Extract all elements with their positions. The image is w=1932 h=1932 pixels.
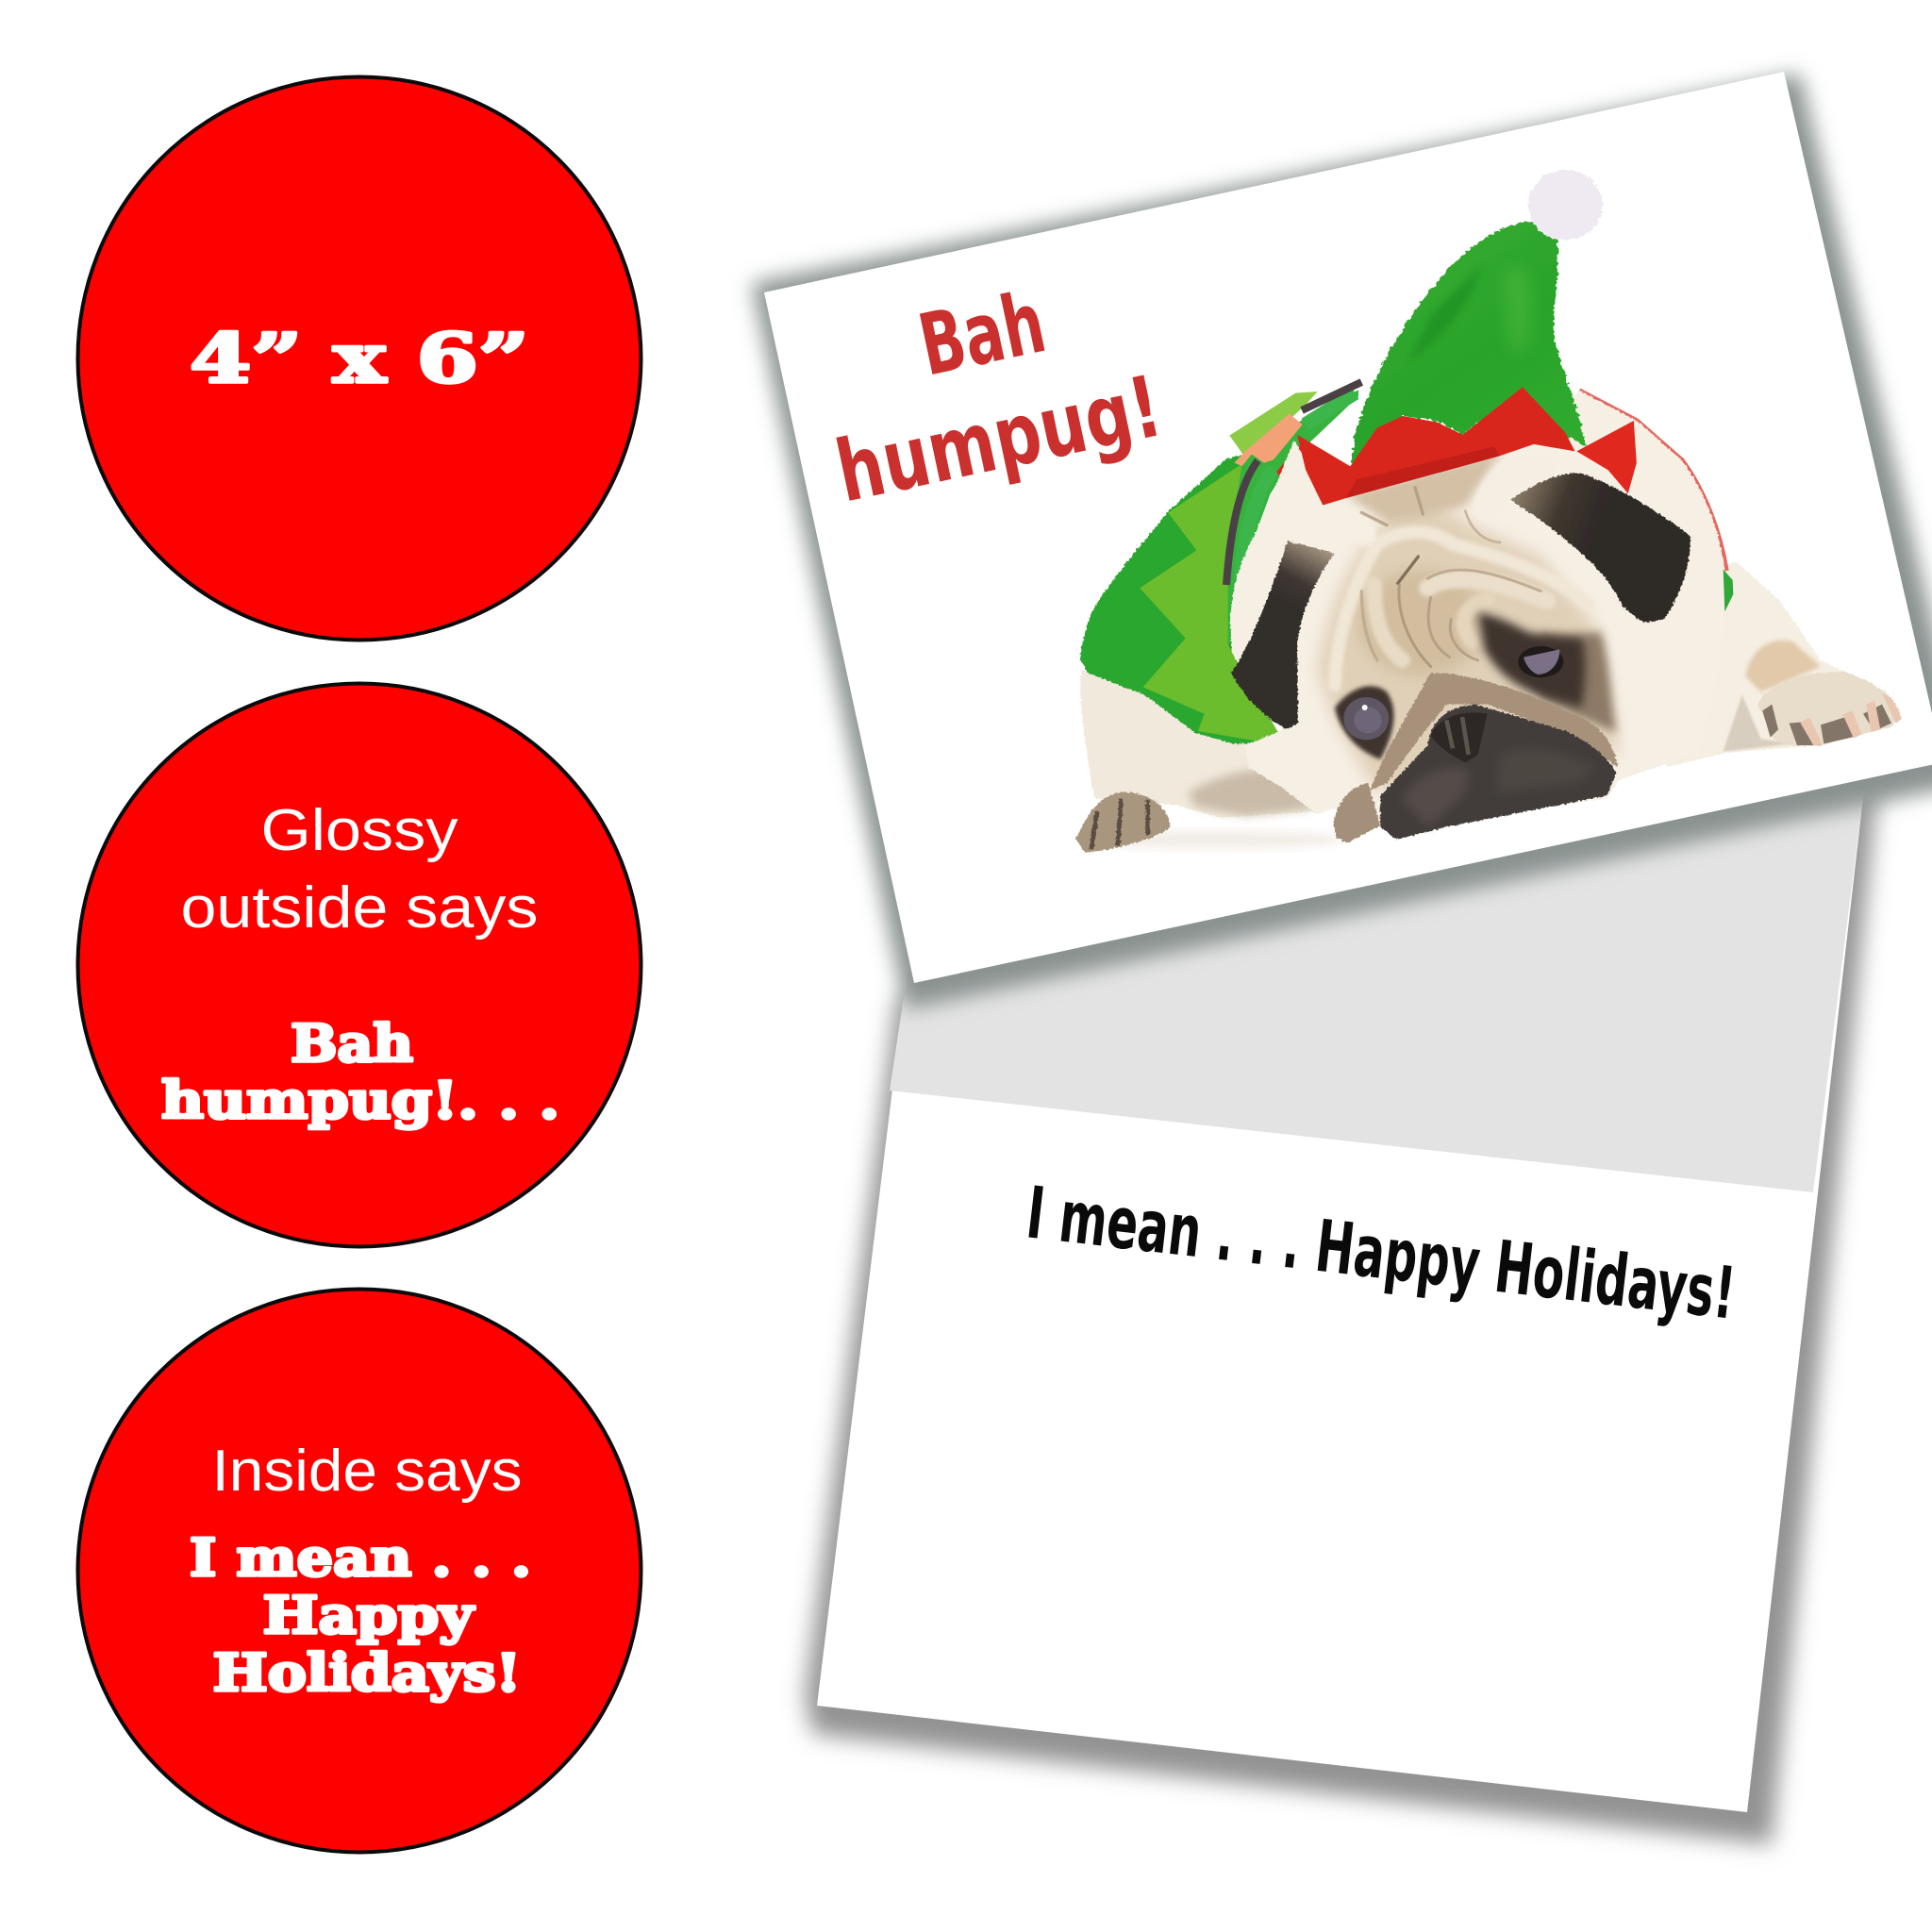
circle: inside text: Holidays! — [213, 1642, 521, 1703]
coat red fringe — [1276, 445, 1305, 483]
left ear — [1231, 541, 1335, 729]
red fur fringe edge — [1579, 391, 1726, 571]
right eye — [1518, 646, 1563, 677]
side trim — [1724, 569, 1733, 611]
forehead tan patch — [1346, 450, 1503, 524]
coat main green — [1080, 453, 1278, 743]
left eye — [1343, 697, 1389, 740]
front card title: Bah — [911, 273, 1054, 396]
muzzle — [1380, 705, 1616, 840]
circle: inside text: Inside says — [211, 1439, 523, 1504]
front card title: humpug! — [828, 357, 1170, 523]
shadow: inside card — [805, 788, 1877, 1844]
circle: glossy outside text — [77, 683, 641, 1247]
coat buckle — [1234, 413, 1303, 466]
coat dark strap — [1226, 382, 1361, 585]
muzzle highlight — [1403, 768, 1469, 827]
cream face folds — [1302, 471, 1588, 686]
circle: inside text: Happy — [262, 1585, 475, 1645]
paw shadow under leg — [1724, 695, 1792, 752]
circle: glossy outside text: humpug!. . . — [161, 1070, 559, 1130]
front card — [764, 72, 1932, 983]
inside card upper grey panel — [890, 789, 1864, 1192]
mid-face tan shading — [1358, 569, 1484, 676]
face wrinkles — [1361, 488, 1541, 667]
face tan patch — [1318, 493, 1620, 792]
nose — [1431, 712, 1488, 762]
circle: card size: 4” x 6” — [190, 318, 529, 398]
head and face — [1230, 391, 1733, 842]
coat green fringe — [1241, 393, 1356, 578]
right eye socket outer fade — [1541, 632, 1616, 733]
fur ruff — [1230, 391, 1726, 827]
circle: card size — [77, 77, 641, 640]
circle: inside text: I mean . . . — [190, 1527, 531, 1588]
elf hat — [1297, 170, 1637, 506]
coat backing under strap — [1228, 390, 1358, 648]
hat brim — [1297, 387, 1575, 506]
right ear — [1511, 474, 1690, 623]
muzzle bridge — [1370, 673, 1618, 791]
claws — [1800, 693, 1902, 746]
circle: glossy outside text: Glossy — [260, 798, 458, 863]
right eye socket — [1478, 613, 1586, 708]
dark toe patches — [1762, 705, 1891, 745]
circle: glossy outside text: outside says — [181, 875, 538, 941]
front card title — [828, 273, 1170, 523]
right leg and paw — [1667, 561, 1902, 767]
pom-pom — [1528, 170, 1603, 241]
shadow: front card — [752, 74, 1932, 1009]
coat pale top panel — [1229, 391, 1318, 458]
front paw — [1333, 783, 1380, 842]
rear paw — [1076, 791, 1170, 853]
circle: glossy outside text: Bah — [291, 1013, 413, 1074]
circle: inside text — [77, 1289, 641, 1853]
inside card — [817, 789, 1864, 1812]
rear body and coat — [1076, 382, 1361, 853]
hat fold — [1408, 263, 1483, 362]
left eye socket — [1335, 686, 1394, 759]
coat light green zigzag collar — [1140, 464, 1278, 743]
pug in elf costume illustration — [1076, 170, 1902, 853]
